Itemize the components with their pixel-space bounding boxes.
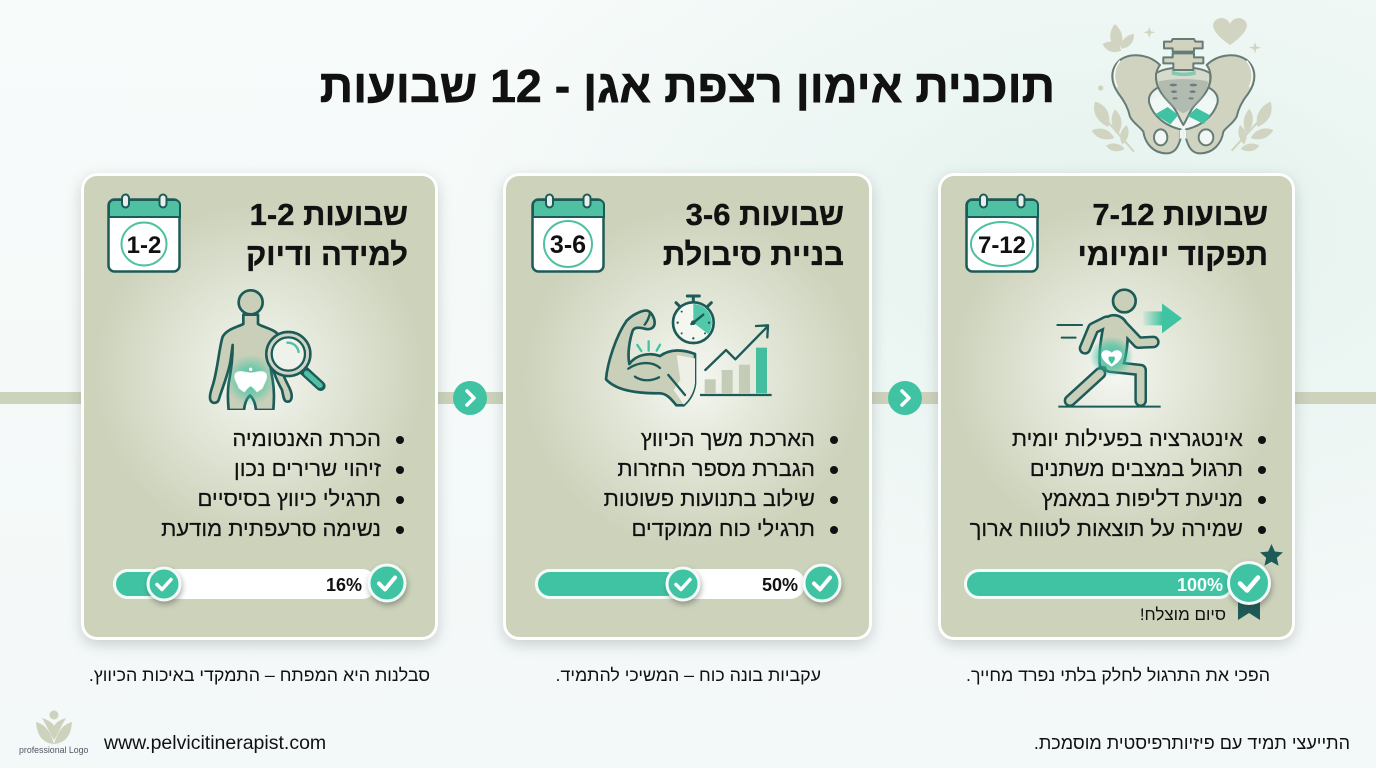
- panel: weeks 7-12: [938, 173, 1295, 640]
- icon: pelvis illustration: [1092, 18, 1274, 154]
- progress bar 16%: [113, 569, 377, 599]
- heading: שבועות 7-12: [1092, 197, 1268, 232]
- bullet list: תרגול במצבים משתנים: [1030, 456, 1243, 481]
- timeline band between second and third card: [872, 392, 938, 404]
- bullet list: נשימה סרעפתית מודעת: [161, 516, 381, 541]
- icon: calendar 1-2: [107, 194, 181, 273]
- footer website: www.pelvicitinerapist.com: [104, 732, 326, 754]
- footer disclaimer: התייעצי תמיד עם פיזיותרפיסטית מוסמכת.: [1034, 733, 1350, 753]
- title: תוכנית אימון רצפת אגן - 12 שבועות: [320, 60, 1055, 112]
- milestone check: [144, 566, 186, 608]
- icon: calendar 3-6: [531, 194, 605, 273]
- progress percent: 16%: [326, 575, 362, 595]
- bullet list: הכרת האנטומיה: [232, 426, 381, 451]
- panel: weeks 3-6: [503, 173, 872, 640]
- heading: [246, 197, 408, 272]
- icon: ribbon: [1238, 602, 1260, 620]
- icon: calendar 7-12: 7-12: [978, 232, 1026, 259]
- arrow: step two to three: [888, 381, 922, 415]
- rising bar chart: [700, 325, 772, 395]
- icon: star: [1260, 544, 1283, 566]
- heading: [663, 197, 844, 272]
- heading: למידה ודיוק: [246, 237, 408, 272]
- end check: [800, 564, 846, 608]
- bullet list: אינטגרציה בפעילות יומית: [1012, 426, 1243, 451]
- panel: weeks 1-2: [81, 173, 438, 640]
- end check: [1225, 561, 1275, 608]
- icon: running figure: [1056, 288, 1182, 408]
- bullet list: [604, 426, 838, 541]
- heading: שבועות 3-6: [686, 197, 844, 232]
- bullet list: [161, 426, 404, 541]
- caption: weeks 7-12: הפכי את התרגול לחלק בלתי נפרד מחייך.: [966, 665, 1270, 685]
- bullet list: מניעת דליפות במאמץ: [1042, 486, 1243, 511]
- logo text: professional Logo: [19, 745, 88, 755]
- bullet list: הארכת משך הכיווץ: [641, 426, 815, 451]
- heading: שבועות 1-2: [250, 197, 408, 232]
- progress fill: [535, 569, 681, 599]
- icon: calendar 3-6: 3-6: [550, 231, 586, 259]
- flexed arm: [606, 311, 695, 405]
- timeline band right: [1295, 392, 1376, 404]
- logo mark: [36, 710, 72, 744]
- milestone check: [664, 566, 705, 608]
- caption: weeks 3-6: עקביות בונה כוח – המשיכי להתמיד.: [556, 665, 821, 685]
- stopwatch: [673, 296, 714, 343]
- progress percent: 50%: [762, 575, 798, 595]
- progress bar 100%: [964, 569, 1230, 599]
- completion label: סיום מוצלח!: [1140, 605, 1226, 624]
- progress fill: [113, 569, 165, 599]
- icon: calendar 7-12: [965, 194, 1039, 273]
- heading: [1077, 197, 1268, 272]
- icon: calendar 1-2: 1-2: [127, 232, 161, 259]
- icon: body with magnifier: [208, 289, 326, 410]
- caption: weeks 1-2: סבלנות היא המפתח – התמקדי באיכות הכיווץ.: [89, 665, 430, 685]
- arrow: step one to two: [453, 381, 487, 415]
- heading: תפקוד יומיומי: [1077, 237, 1268, 272]
- bullet list: הגברת מספר החזרות: [617, 456, 815, 481]
- progress percent: 100%: [1177, 575, 1223, 595]
- bullet list: תרגילי כוח ממוקדים: [631, 516, 815, 541]
- timeline band left: [0, 392, 81, 404]
- progress bar 50%: [535, 569, 805, 599]
- progress fill: [964, 569, 1234, 599]
- bullet list: [970, 426, 1266, 541]
- bullet list: תרגילי כיווץ בסיסיים: [198, 486, 381, 511]
- bullet list: זיהוי שרירים נכון: [234, 456, 381, 481]
- bullet list: שמירה על תוצאות לטווח ארוך: [970, 516, 1243, 541]
- timeline band between first and second card: [438, 392, 503, 404]
- end check: [365, 564, 410, 608]
- bullet list: שילוב בתנועות פשוטות: [604, 486, 815, 511]
- footer logo: [19, 710, 88, 755]
- heading: בניית סיבולת: [663, 237, 844, 272]
- icon: muscle, stopwatch and chart: [604, 294, 772, 407]
